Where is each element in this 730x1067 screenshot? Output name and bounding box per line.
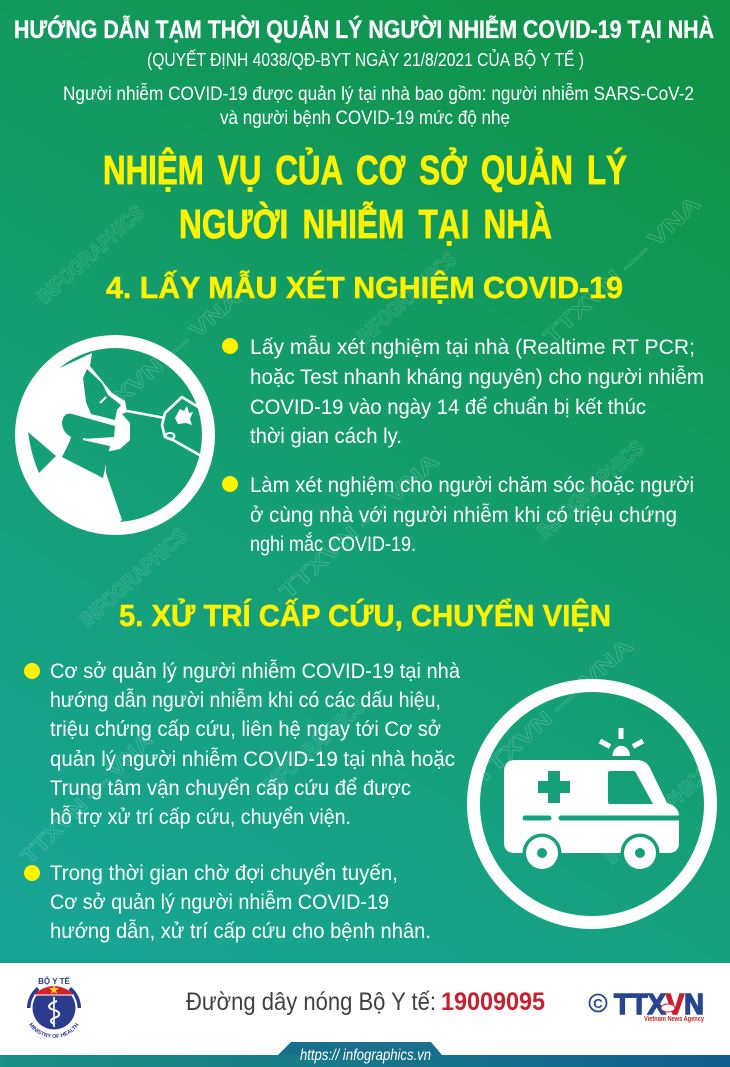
logo: TTXVN: TTXVN — [614, 989, 704, 1021]
logo: ministry of health: MINISTRY OF HEALTH — [29, 1022, 79, 1038]
bullets section 5: triệu chứng cấp cứu, liên hệ ngay tới Cơ sở — [50, 718, 441, 741]
icon: nasal swab test — [15, 342, 208, 545]
watermarks: INFOGRAPHICS — [353, 248, 461, 349]
watermarks: TTXVN — VNA — [17, 729, 157, 869]
watermarks: TTXVN — VNA — [470, 634, 638, 789]
bullets section 4: hoặc Test nhanh kháng nguyên) cho người nhiễm — [250, 366, 704, 389]
section 4 heading: 4. LẤY MẪU XÉT NGHIỆM COVID-19 — [106, 269, 623, 305]
bullets section 5: Cơ sở quản lý người nhiễm COVID-19 — [50, 891, 389, 914]
logo: TTXVN: C — [593, 996, 603, 1011]
watermarks: INFOGRAPHICS — [76, 524, 192, 632]
hotline: 19009095 — [441, 988, 545, 1016]
hotline: Đường dây nóng Bộ Y tế: — [186, 988, 436, 1016]
bullets section 5: Trung tâm vận chuyển cấp cứu để được — [50, 777, 411, 800]
intro text — [63, 83, 694, 129]
watermarks: INFOGRAPHICS — [258, 695, 370, 799]
bullets section 5: quản lý người nhiễm COVID-19 tại nhà hoặc — [50, 748, 455, 771]
bullets section 4: nghi mắc COVID-19. — [250, 533, 416, 556]
watermarks: TTXVN — VNA — [83, 286, 245, 432]
bullets section 5 — [24, 660, 460, 943]
bullets section 5: hỗ trợ xử trí cấp cứu, chuyển viện. — [50, 806, 351, 829]
watermarks — [17, 192, 716, 869]
watermarks: INFOGRAPHICS — [33, 201, 149, 309]
yellow heading: NGƯỜI NHIỄM TẠI NHÀ — [179, 201, 552, 247]
bullets section 4 — [222, 336, 704, 556]
bullets section 5: Cơ sở quản lý người nhiễm COVID-19 tại nhà — [50, 660, 460, 683]
website url: https:// infographics.vn — [300, 1047, 431, 1064]
bullets section 5: hướng dẫn người nhiễm khi có các dấu hiệu, — [50, 689, 441, 712]
intro text: và người bệnh COVID-19 mức độ nhẹ — [220, 108, 510, 129]
watermarks: TTXVN — VNA — [276, 449, 444, 604]
logo: ministry of health: BỘ Y TẾ — [38, 976, 71, 986]
logo: ministry of health — [27, 976, 81, 1038]
subtitle: (QUYẾT ĐỊNH 4038/QĐ-BYT NGÀY 21/8/2021 CỦA BỘ Y TẾ ) — [147, 49, 584, 70]
icon: ambulance — [474, 686, 710, 922]
bullets section 5: hướng dẫn, xử trí cấp cứu cho bệnh nhân. — [50, 920, 431, 943]
section 5 heading: 5. XỬ TRÍ CẤP CỨU, CHUYỂN VIỆN — [119, 597, 611, 633]
yellow heading — [103, 147, 627, 247]
bullets section 4: ở cùng nhà với người nhiễm khi có triệu chứng — [250, 504, 677, 527]
watermarks: INFOGRAPHICS — [533, 436, 649, 544]
logo: TTXVN: Vietnam News Agency — [644, 1016, 704, 1023]
bullets section 4: thời gian cách ly. — [250, 425, 402, 448]
bullets section 5: Trong thời gian chờ đợi chuyển tuyến, — [50, 862, 398, 885]
bullets section 4: Lấy mẫu xét nghiệm tại nhà (Realtime RT PCR; — [250, 336, 695, 359]
bullets section 4: Làm xét nghiệm cho người chăm sóc hoặc người — [250, 474, 694, 497]
watermarks: TTXVN — VNA — [540, 192, 705, 349]
footer panel — [0, 960, 730, 1067]
bullets section 4: COVID-19 vào ngày 14 để chuẩn bị kết thúc — [250, 396, 646, 419]
